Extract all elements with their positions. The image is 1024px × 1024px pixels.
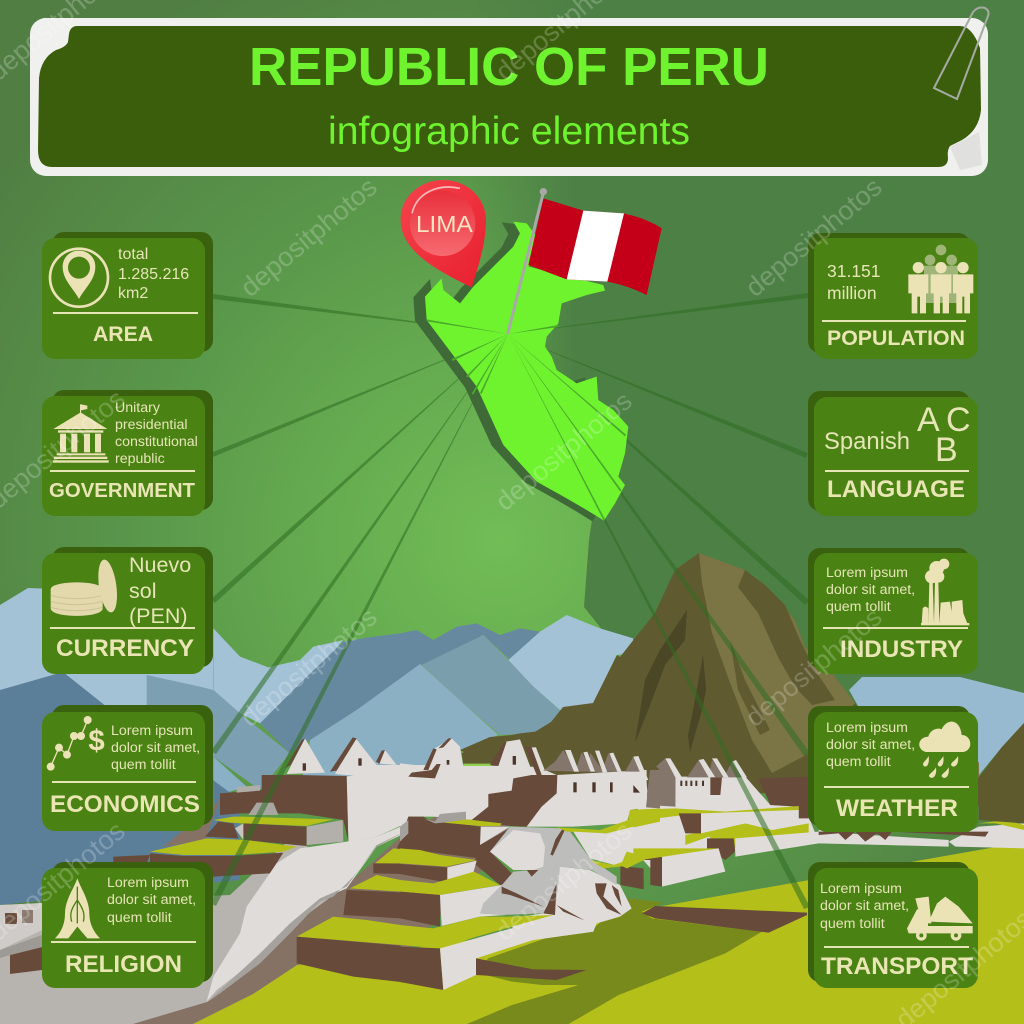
ruins: row of gables bbox=[665, 758, 747, 795]
subtitle: infographic elements bbox=[328, 110, 690, 153]
panel: industry bbox=[808, 548, 978, 674]
watermark text: depositphotos bbox=[490, 816, 638, 947]
grass: shadow bbox=[467, 898, 762, 1024]
banner board bbox=[38, 26, 981, 167]
text: weather value: quem tollit bbox=[826, 754, 891, 770]
centre: terrace three bbox=[400, 915, 553, 948]
label: religion: RELIGION bbox=[65, 951, 182, 978]
ruins: low terrace bbox=[625, 848, 725, 887]
centre: terrace one bbox=[400, 848, 477, 867]
label: industry: INDUSTRY bbox=[840, 636, 963, 663]
pin: Lima: LIMA bbox=[416, 211, 474, 237]
label: population: POPULATION bbox=[827, 327, 965, 350]
centre: brown stepped wall bbox=[472, 775, 557, 827]
blue slate block left bbox=[0, 672, 240, 905]
label: weather: WEATHER bbox=[836, 795, 958, 822]
text: religion value: quem tollit bbox=[107, 910, 172, 926]
flag pole bbox=[508, 188, 547, 334]
text: currency value: sol bbox=[129, 579, 156, 603]
panel: population bbox=[808, 233, 978, 359]
landscape bbox=[0, 553, 1024, 1024]
text: transport value: dolor sit amet, bbox=[820, 898, 909, 914]
ground: left gray bbox=[0, 830, 330, 1024]
banner frame bbox=[30, 18, 988, 176]
panel: government bbox=[42, 390, 213, 516]
text: industry value: dolor sit amet, bbox=[826, 582, 915, 598]
ruins centre, drawn in crop units bbox=[400, 723, 660, 990]
mountain ridge: right dark bbox=[960, 723, 1024, 822]
ruins: grass strips bbox=[629, 806, 799, 822]
icon: rain cloud bbox=[919, 722, 970, 778]
text: industry value: Lorem ipsum bbox=[826, 565, 908, 581]
range: pale right peak bbox=[508, 615, 633, 710]
centre: terrace two bbox=[400, 872, 500, 895]
ground: taupe slope bbox=[133, 790, 520, 1024]
text: weather value: dolor sit amet, bbox=[826, 737, 915, 753]
panel: area bbox=[42, 232, 213, 359]
icon: letters: B bbox=[935, 431, 958, 469]
range: mid blue bbox=[300, 664, 498, 790]
text: currency value: (PEN) bbox=[129, 604, 188, 628]
range: left teal bbox=[147, 675, 290, 790]
right blue sky mountain bbox=[849, 677, 1024, 780]
ruins: brown wall behind panel bbox=[759, 777, 809, 818]
text: economics value: quem tollit bbox=[111, 757, 176, 773]
icon: government building bbox=[53, 404, 109, 463]
watermark text: depositphotos bbox=[740, 602, 888, 733]
ruins: white town bbox=[625, 772, 819, 870]
text: area value: total bbox=[118, 246, 148, 263]
map rays bbox=[427, 319, 626, 520]
icon: factory bbox=[921, 559, 969, 625]
icon: people bbox=[908, 245, 973, 313]
centre: white town bbox=[400, 763, 647, 830]
panel: transport bbox=[808, 862, 978, 988]
watermark text: depositphotos bbox=[235, 602, 383, 733]
ruins: terrace 2 bbox=[350, 875, 401, 892]
text: currency value: Nuevo bbox=[129, 553, 191, 577]
ruins: upper grass bbox=[213, 817, 333, 826]
label: language: LANGUAGE bbox=[827, 476, 965, 503]
watermark text: depositphotos bbox=[740, 172, 888, 303]
icon: growth chart with dollar bbox=[47, 716, 105, 771]
pin: Lima bbox=[401, 180, 486, 287]
text: government value: republic bbox=[115, 451, 165, 467]
background: darker right field bbox=[470, 0, 1024, 720]
mountain: Huayna Picchu bbox=[460, 553, 890, 800]
grass: brown path bbox=[642, 906, 807, 933]
range: teal ridge bbox=[422, 635, 562, 735]
text: economics value: dolor sit amet, bbox=[111, 740, 200, 756]
title banner bbox=[30, 8, 989, 176]
icon: letters: A bbox=[917, 401, 940, 439]
ruins: gables bbox=[285, 737, 408, 778]
text: government value: presidential bbox=[115, 417, 188, 433]
panel: economics bbox=[42, 705, 213, 831]
label: economics: ECONOMICS bbox=[50, 791, 200, 818]
title: REPUBLIC OF PERU bbox=[249, 37, 769, 97]
ruins: mid terrace bbox=[150, 838, 297, 855]
label: transport: TRANSPORT bbox=[821, 953, 973, 980]
text: religion value: Lorem ipsum bbox=[107, 875, 189, 891]
text: language value: Spanish bbox=[824, 428, 910, 455]
text: transport value: Lorem ipsum bbox=[820, 881, 902, 897]
paper clip bbox=[934, 8, 989, 99]
text: industry value: quem tollit bbox=[826, 599, 891, 615]
ruins: terrace 1 bbox=[297, 917, 401, 945]
text: transport value: quem tollit bbox=[820, 916, 885, 932]
label: currency: CURRENCY bbox=[56, 635, 194, 662]
range: slate ridge bbox=[260, 623, 540, 753]
icon: praying hands bbox=[55, 878, 100, 938]
text: religion value: dolor sit amet, bbox=[107, 892, 196, 908]
text: area value: km2 bbox=[118, 285, 148, 302]
centre: right strips bbox=[557, 808, 660, 833]
ruins: upper brown block bbox=[397, 817, 413, 850]
distant mountains: left edge bbox=[0, 588, 213, 800]
watermark text: depositphotos bbox=[235, 172, 383, 303]
text: population value: 31.151 bbox=[827, 261, 881, 281]
text: government value: constitutional bbox=[115, 434, 198, 450]
corner curl bbox=[950, 132, 982, 170]
panel: language bbox=[808, 391, 978, 516]
panel: weather bbox=[808, 706, 978, 832]
icon: dump truck bbox=[907, 897, 973, 941]
text: area value: 1.285.216 bbox=[118, 266, 189, 283]
centre: upper brown block bbox=[400, 814, 480, 858]
ruins: white town bbox=[347, 765, 413, 842]
ruins: white stairway bbox=[207, 823, 408, 1002]
range: left lower blue bbox=[213, 757, 247, 797]
ruins right, drawn in crop units bbox=[467, 758, 1024, 1024]
icon: growth chart with dollar: $ bbox=[88, 725, 105, 758]
distant mountains, drawn in crop units bbox=[147, 615, 633, 797]
icon: location pin bbox=[50, 249, 108, 307]
icon: coins bbox=[51, 558, 120, 616]
centre: dark grass path bbox=[476, 958, 587, 980]
flag of Peru bbox=[528, 198, 662, 295]
ruins: terrace 3 bbox=[375, 848, 401, 863]
panel: religion bbox=[42, 862, 213, 988]
text: government value: Unitary bbox=[115, 400, 161, 416]
icon: letters bbox=[917, 401, 971, 469]
ground: grass bbox=[193, 842, 1024, 1024]
centre: rock bbox=[480, 827, 632, 940]
ruins: central brown wall bbox=[220, 775, 348, 842]
label: government: GOVERNMENT bbox=[49, 480, 196, 502]
map of Peru with flag and pin bbox=[401, 180, 662, 521]
map shadow bbox=[413, 222, 617, 521]
panel: currency bbox=[42, 547, 213, 674]
far-left wall bbox=[0, 903, 42, 974]
label: area: AREA bbox=[93, 323, 153, 346]
text: economics value: Lorem ipsum bbox=[111, 723, 193, 739]
icon: letters: C bbox=[946, 401, 971, 439]
text: weather value: Lorem ipsum bbox=[826, 720, 908, 736]
centre: gables bbox=[408, 723, 660, 808]
range: light blue front ridge bbox=[213, 628, 343, 723]
ruins left, drawn in crop units bbox=[113, 737, 413, 1003]
connector rays: shaded lines from the map to each panel bbox=[210, 293, 810, 909]
watermark text: depositphotos bbox=[490, 386, 638, 517]
text: population value: million bbox=[827, 283, 877, 303]
map: Peru bbox=[425, 222, 628, 521]
